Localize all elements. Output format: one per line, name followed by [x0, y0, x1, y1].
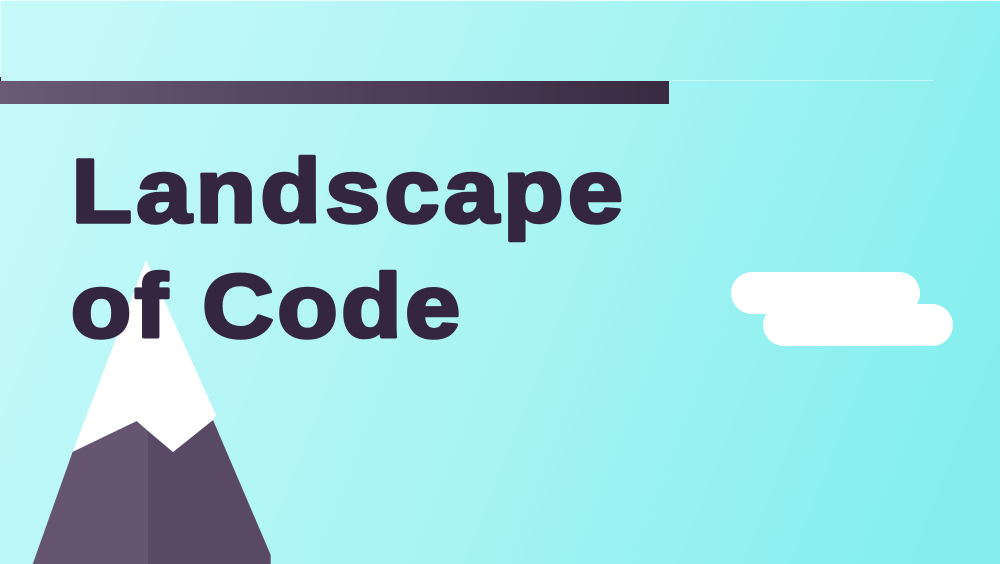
- title: [71, 141, 627, 357]
- title line 1: Landscape: [72, 141, 627, 242]
- small tick above bar: [0, 77, 1, 81]
- title line 2: of Code: [71, 256, 464, 357]
- top bar: [0, 81, 669, 104]
- frame line top left: [1, 0, 1000, 77]
- mountain: [33, 260, 271, 564]
- cloud: [731, 272, 953, 346]
- mountain left face: [33, 421, 148, 564]
- snow cap: [73, 260, 216, 452]
- mountain right face: [148, 420, 271, 564]
- thin rule: [669, 80, 934, 81]
